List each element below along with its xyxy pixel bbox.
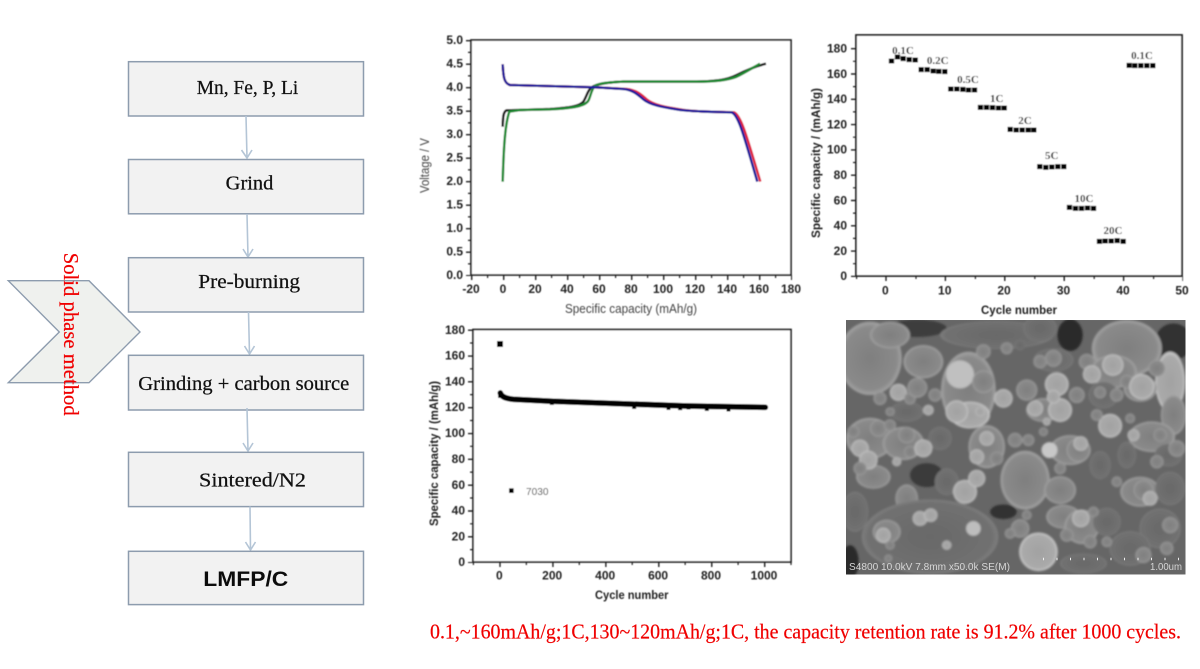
chart: rate capability: 0	[882, 284, 889, 298]
arrow: step 3 to 4	[244, 312, 254, 354]
chart: cycle life over 1000 cycles: 160	[445, 348, 465, 362]
chart: cycle life over 1000 cycles: Cycle number	[595, 590, 669, 602]
chart: rate capability: 20	[997, 284, 1011, 298]
chart: voltage vs specific capacity: 4.5	[446, 56, 463, 70]
step box: Grind: Grind	[226, 172, 273, 194]
chart: voltage vs specific capacity: 1.0	[446, 221, 463, 235]
chart: cycle life over 1000 cycles: 60	[452, 478, 465, 492]
chart: rate capability: 140	[827, 92, 847, 106]
chart: voltage vs specific capacity: 80	[624, 282, 638, 296]
step box: Pre-burning: Pre-burning	[198, 271, 300, 293]
step box: Sintered/N2: Sintered/N2	[199, 470, 306, 492]
chart: rate capability: 160	[827, 67, 847, 81]
chart: cycle life over 1000 cycles: 600	[648, 568, 668, 582]
chart: voltage vs specific capacity: 180	[781, 282, 801, 296]
chart: cycle life over 1000 cycles: 180	[445, 323, 465, 337]
chart: voltage vs specific capacity: 0.0	[446, 268, 463, 282]
chart: voltage vs specific capacity: 3.5	[446, 104, 463, 118]
chart: rate capability: 0	[840, 269, 847, 283]
chart: voltage vs specific capacity: 40	[560, 282, 574, 296]
arrow: step 1 to 2	[242, 116, 252, 158]
chart: voltage vs specific capacity: 4.0	[446, 80, 463, 94]
chart: cycle life over 1000 cycles: 7030	[526, 486, 549, 498]
chart: rate capability: 0.5C	[957, 74, 979, 86]
chart: rate capability: 10C	[1075, 193, 1094, 205]
arrow: step 4 to 5	[243, 408, 253, 451]
chart: cycle life over 1000 cycles: 800	[701, 568, 721, 582]
SEM scale label: 1.00um	[1150, 561, 1182, 573]
caption: capacity summary: 0.1,~160mAh/g;1C,130~120mAh/g;1C, the capacity retention rate is 91.2% after 1000 cycles.	[430, 620, 1181, 644]
vertical label: Solid phase method	[59, 253, 83, 416]
chart: rate capability: 60	[834, 194, 847, 208]
chart: voltage vs specific capacity: -20	[462, 282, 480, 296]
flowchart: solid phase process	[128, 62, 364, 605]
step box: Grinding + carbon source: Grinding + carbon source	[138, 373, 349, 395]
chart: rate capability: 40	[834, 218, 847, 232]
arrow: step 5 to 6	[246, 506, 256, 550]
chart: voltage vs specific capacity: Voltage / V	[418, 137, 432, 193]
chart: voltage vs specific capacity: 100	[653, 282, 673, 296]
chart: cycle life over 1000 cycles: 100	[445, 426, 465, 440]
chart: voltage vs specific capacity: 160	[749, 282, 769, 296]
chart: rate capability: 20	[834, 244, 847, 258]
chart: voltage vs specific capacity: Specific capacity (mAh/g)	[565, 302, 697, 316]
chart: rate capability	[811, 35, 1189, 317]
chart: rate capability: 5C	[1045, 150, 1058, 162]
chart: voltage vs specific capacity: 20	[528, 282, 542, 296]
chart: cycle life over 1000 cycles: 1000	[751, 568, 778, 582]
chart: cycle life over 1000 cycles	[429, 323, 792, 602]
step box: Grind	[128, 160, 364, 214]
chart: voltage vs specific capacity: 3.0	[446, 127, 463, 141]
chart: rate capability: 80	[834, 168, 847, 182]
chart: rate capability: Specific capacity / (mAh/g)	[811, 88, 823, 238]
chart: cycle life over 1000 cycles: 400	[595, 568, 616, 582]
chart: rate capability: Cycle number	[981, 305, 1058, 317]
chart: cycle life over 1000 cycles: Specific capacity / (mAh/g)	[429, 381, 441, 526]
chevron: solid phase method	[8, 253, 140, 416]
chart: rate capability: 0.1C	[1131, 50, 1153, 62]
chart: rate capability: 2C	[1018, 115, 1032, 127]
step box: Pre-burning	[128, 258, 364, 312]
arrow: step 2 to 3	[243, 214, 253, 257]
chart: voltage vs specific capacity: 0	[500, 282, 507, 296]
chart: voltage vs specific capacity: 60	[592, 282, 606, 296]
chart: voltage vs specific capacity: 5.0	[446, 33, 463, 47]
result box: LMFP/C	[128, 551, 364, 605]
chart: rate capability: 120	[827, 118, 847, 132]
SEM scale bar dots	[1043, 558, 1182, 560]
step box: Sintered/N2	[128, 452, 364, 507]
SEM caption: S4800 10.0kV 7.8mm x50.0k SE(M)	[849, 561, 1010, 573]
chart: rate capability: 0.2C	[927, 55, 949, 67]
chart: rate capability: 1C	[990, 93, 1003, 105]
chart: rate capability: 50	[1175, 284, 1189, 298]
step box: Grinding + carbon source	[128, 355, 364, 410]
chart: voltage vs specific capacity: 0.5	[446, 244, 463, 258]
SEM micrograph	[838, 315, 1192, 578]
chart: cycle life over 1000 cycles: 80	[452, 452, 465, 466]
chart: rate capability: 10	[938, 284, 952, 298]
chart: cycle life over 1000 cycles: 200	[542, 568, 563, 582]
chart: cycle life over 1000 cycles: 120	[445, 400, 465, 414]
chart: cycle life over 1000 cycles: 0	[458, 555, 465, 569]
chart: voltage vs specific capacity	[418, 33, 801, 316]
chart: rate capability: 100	[827, 142, 847, 156]
chart: rate capability: 30	[1057, 284, 1070, 298]
chart: rate capability: 20C	[1104, 225, 1123, 237]
chart: voltage vs specific capacity: 1.5	[446, 198, 463, 212]
chart: voltage vs specific capacity: 2.0	[446, 174, 463, 188]
chart: voltage vs specific capacity: 140	[717, 282, 737, 296]
result box: LMFP/C: LMFP/C	[203, 568, 288, 591]
chart: rate capability: 40	[1116, 284, 1130, 298]
step box: Mn, Fe, P, Li	[128, 62, 364, 116]
chart: cycle life over 1000 cycles: 140	[445, 374, 465, 388]
chart: voltage vs specific capacity: 2.5	[446, 150, 463, 164]
chart: rate capability: 180	[827, 42, 847, 56]
step box: Mn, Fe, P, Li: Mn, Fe, P, Li	[197, 77, 299, 99]
chart: cycle life over 1000 cycles: 40	[452, 504, 465, 518]
chart: rate capability: 0.1C	[892, 45, 914, 57]
chart: voltage vs specific capacity: 120	[685, 282, 705, 296]
chart: cycle life over 1000 cycles: 20	[452, 530, 465, 544]
chart: cycle life over 1000 cycles: 0	[496, 568, 503, 582]
